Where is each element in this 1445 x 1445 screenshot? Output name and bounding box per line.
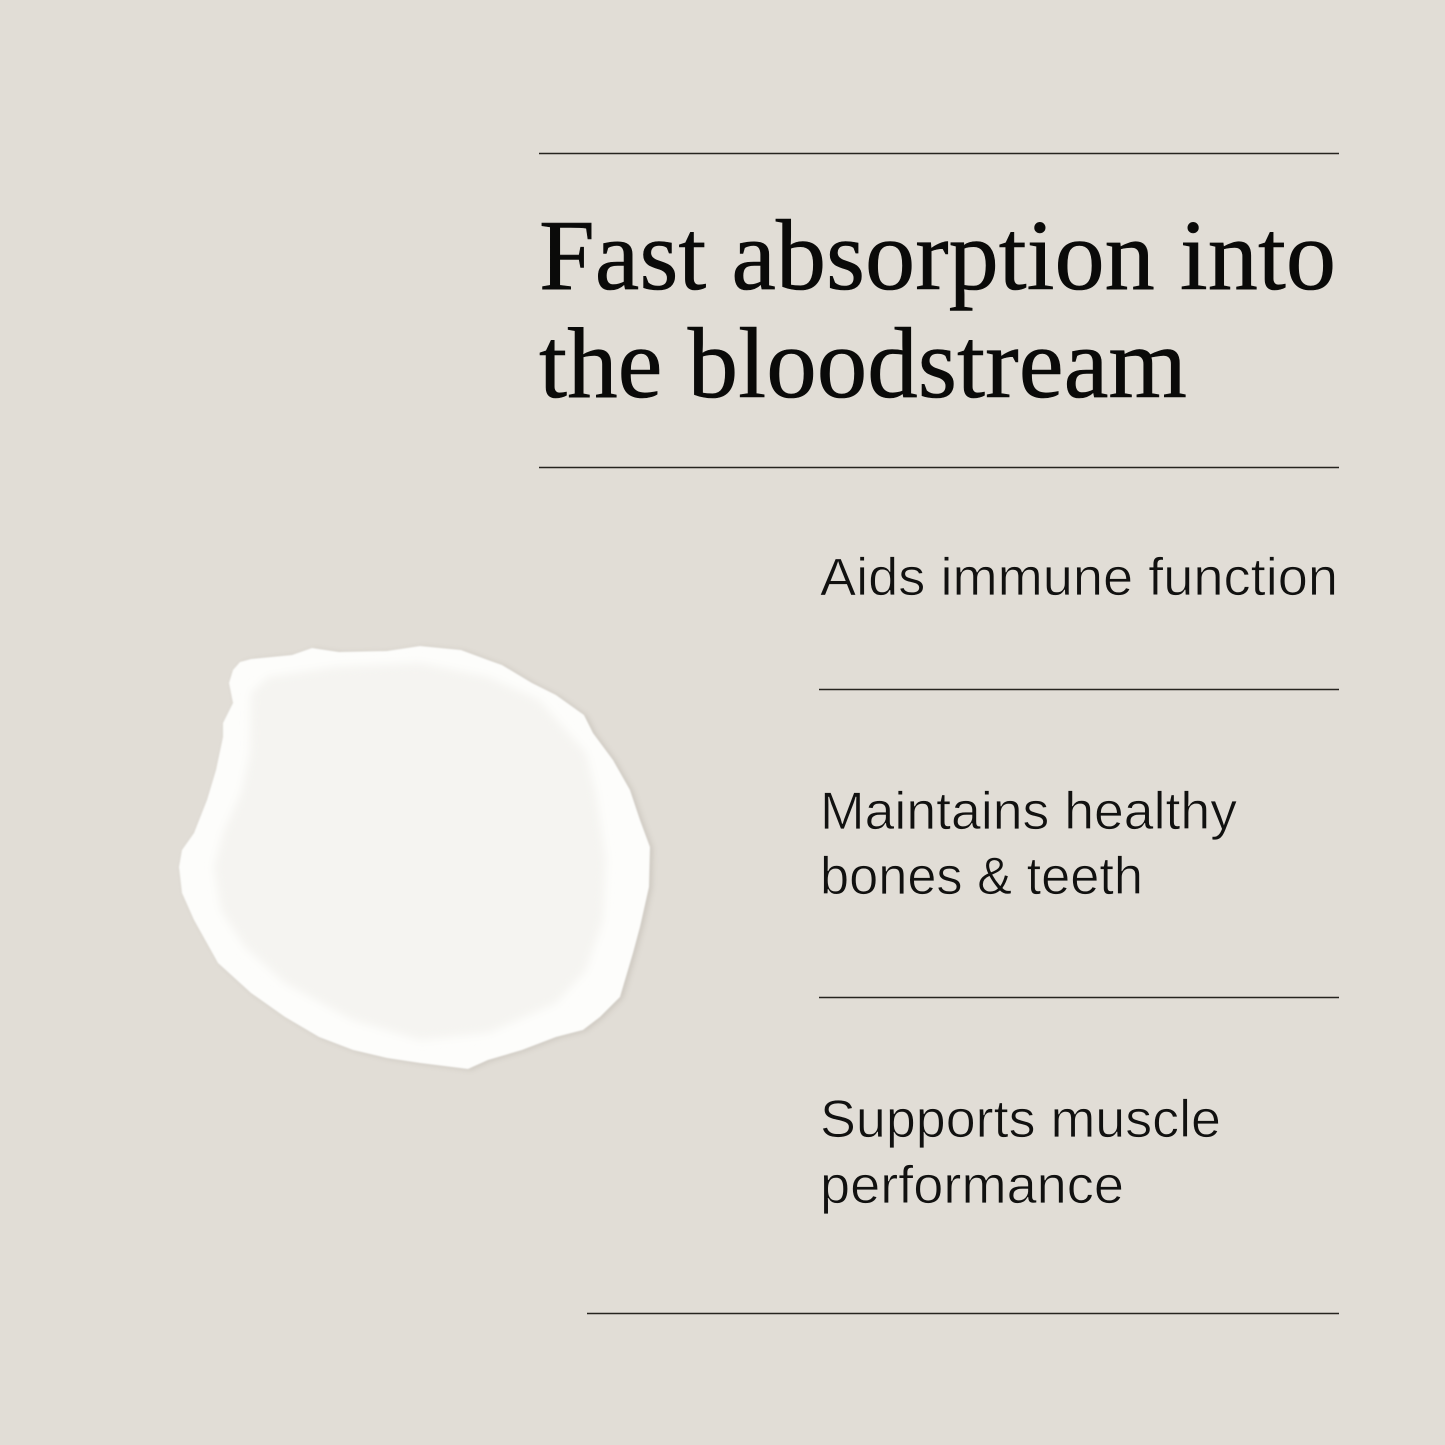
benefit: immune function: Aids immune function — [820, 548, 1338, 607]
icon: white cream swatch — [179, 646, 653, 1070]
benefit: bones and teeth: Maintains healthy — [820, 782, 1238, 841]
title — [539, 199, 1336, 419]
benefit: bones and teeth — [820, 782, 1238, 906]
divider: after benefit one — [819, 688, 1339, 690]
divider: bottom of list — [587, 1312, 1339, 1314]
title: the bloodstream — [539, 307, 1187, 419]
benefit: muscle performance — [820, 1090, 1221, 1215]
title: Fast absorption into — [539, 199, 1336, 311]
benefit: bones and teeth: bones & teeth — [820, 847, 1143, 906]
benefit: muscle performance: Supports muscle — [820, 1090, 1221, 1149]
divider: after benefit two — [819, 996, 1339, 998]
divider: bottom of heading — [539, 466, 1339, 468]
divider: top of heading — [539, 152, 1339, 154]
benefit: muscle performance: performance — [820, 1156, 1124, 1215]
